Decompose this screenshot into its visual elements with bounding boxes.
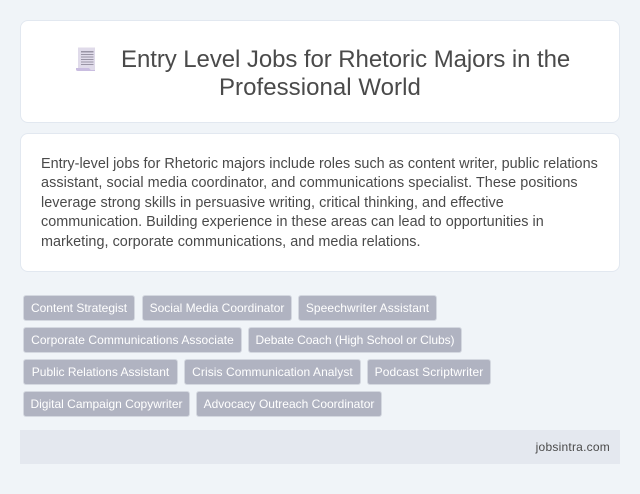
title line 2: Professional World bbox=[219, 74, 421, 101]
description text bbox=[41, 156, 598, 250]
tag bbox=[23, 391, 190, 417]
tag: Podcast Scriptwriter bbox=[375, 365, 483, 379]
description text: leverage strong skills in persuasive writing, critical thinking, and effective bbox=[41, 195, 504, 211]
panel: header bbox=[20, 20, 620, 123]
tag: Speechwriter Assistant bbox=[306, 301, 429, 315]
tag: Content Strategist bbox=[31, 301, 127, 315]
tag bbox=[248, 327, 462, 353]
tag bbox=[184, 359, 361, 385]
title line 1: Entry Level Jobs for Rhetoric Majors in the bbox=[121, 46, 570, 73]
description text: assistant, social media coordinator, and communications specialist. These positions bbox=[41, 175, 578, 191]
tag bbox=[142, 295, 292, 321]
tag bbox=[23, 359, 178, 385]
footer source text: jobsintra.com bbox=[536, 440, 610, 454]
description text: marketing, corporate communications, and media relations. bbox=[41, 234, 421, 250]
tag: Corporate Communications Associate bbox=[31, 333, 234, 347]
tag: Social Media Coordinator bbox=[150, 301, 284, 315]
panel: description bbox=[20, 133, 620, 272]
tag bbox=[23, 295, 135, 321]
footer bar bbox=[20, 430, 620, 464]
tag: Digital Campaign Copywriter bbox=[30, 397, 183, 411]
tag: Public Relations Assistant bbox=[32, 365, 169, 379]
icon: document scroll bbox=[76, 48, 95, 71]
tag bbox=[298, 295, 437, 321]
description text: Entry-level jobs for Rhetoric majors include roles such as content writer, public relations bbox=[41, 156, 598, 172]
tag: Debate Coach (High School or Clubs) bbox=[255, 333, 455, 347]
description text: communication. Building experience in these areas can lead to opportunities in bbox=[41, 214, 544, 230]
tag bbox=[367, 359, 491, 385]
tag bbox=[23, 327, 242, 353]
tag bbox=[196, 391, 382, 417]
tag: Advocacy Outreach Coordinator bbox=[204, 397, 374, 411]
tags bbox=[23, 295, 491, 417]
tag: Crisis Communication Analyst bbox=[192, 365, 353, 379]
